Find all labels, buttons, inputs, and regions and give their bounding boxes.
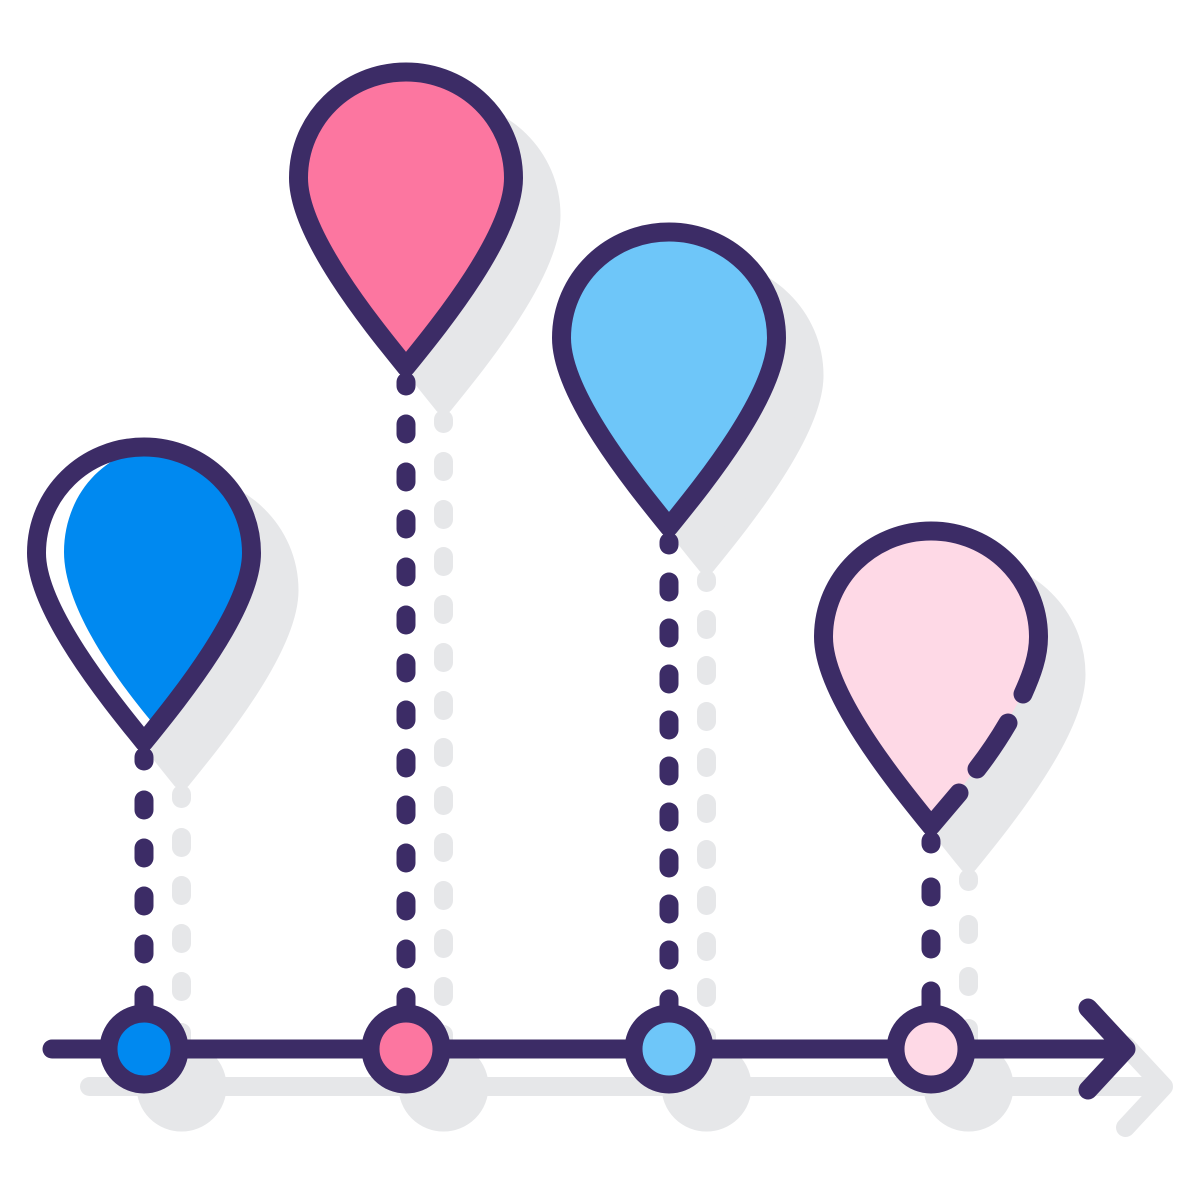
pin 1: blue [36, 447, 252, 742]
node 1 [108, 1014, 180, 1084]
dashed line 4 [922, 841, 940, 1015]
pin 3: light blue [562, 232, 776, 527]
node 4 [896, 1014, 966, 1084]
dashed line 3 [660, 542, 678, 1015]
pin 2: pink [298, 72, 514, 367]
dashed line 2 [396, 382, 416, 1015]
pin 4: pale pink, broken outline [824, 531, 1038, 826]
dashed line 1 [134, 757, 154, 1015]
node 2 [370, 1014, 442, 1084]
axis arrow [52, 1008, 1126, 1090]
shadow layer [74, 110, 1164, 1128]
node 3 [634, 1014, 704, 1084]
